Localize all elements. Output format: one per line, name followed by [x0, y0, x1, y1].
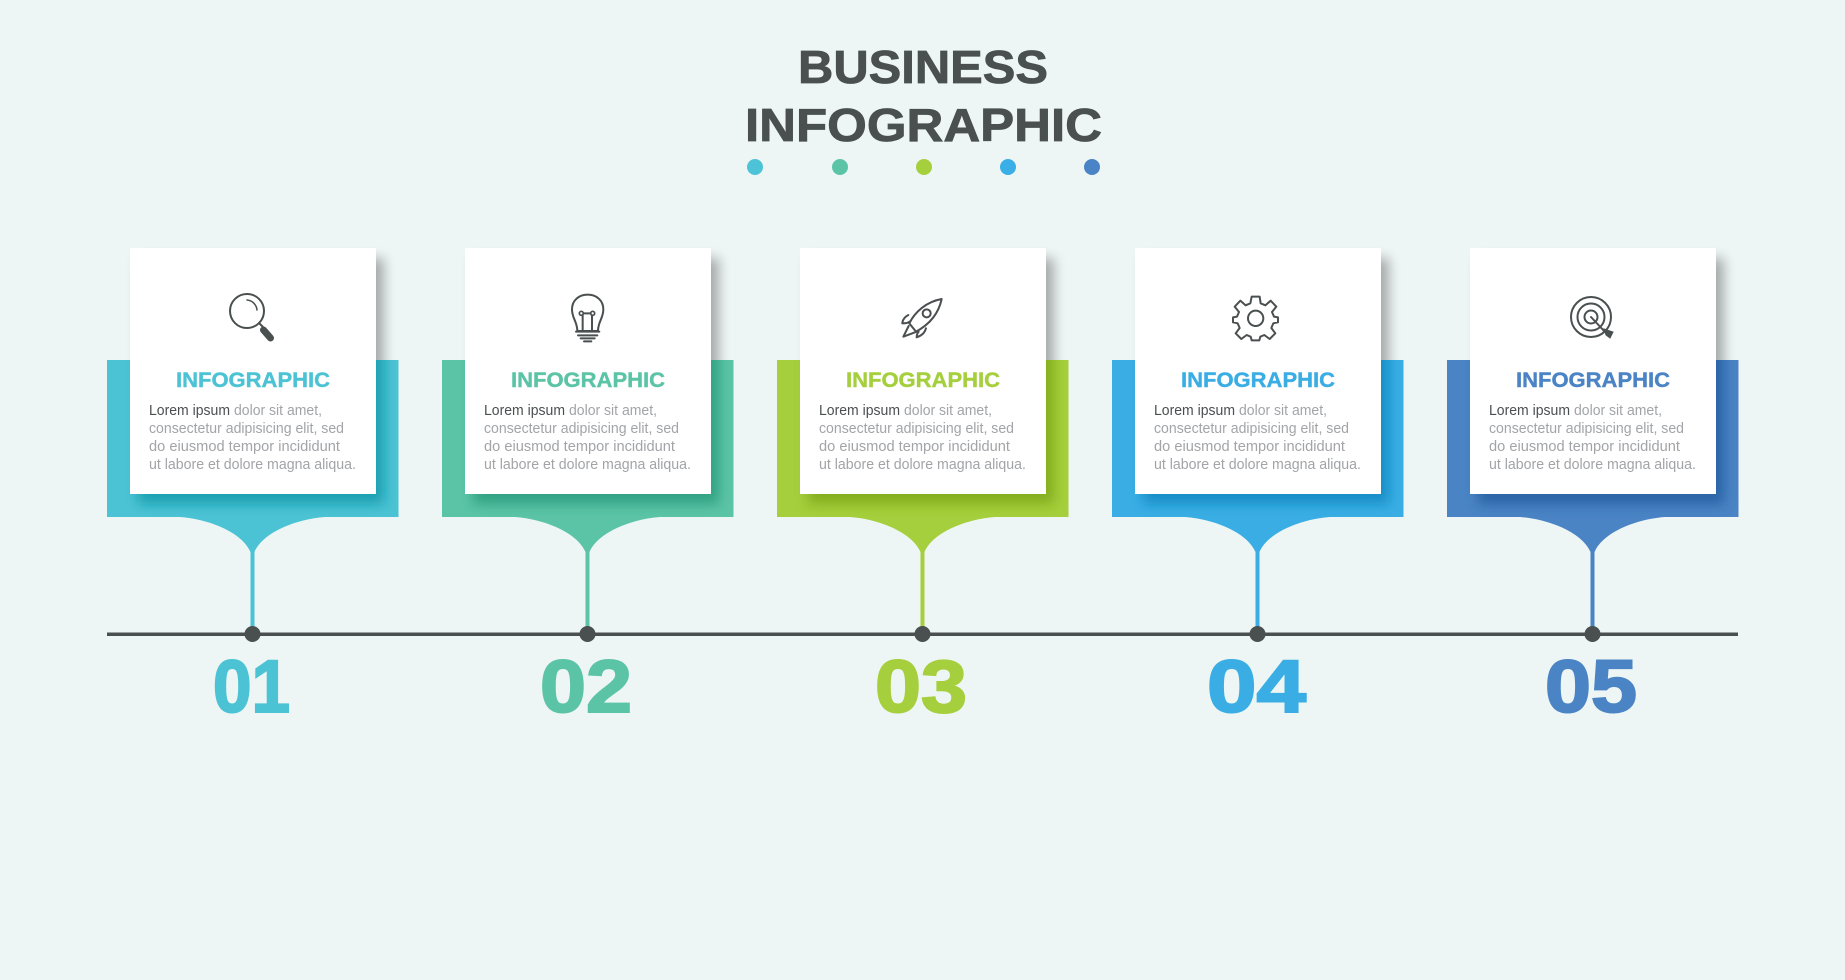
- title: INFOGRAPHIC: [745, 99, 1102, 151]
- title: BUSINESS: [798, 41, 1048, 93]
- heading: INFOGRAPHIC: [511, 369, 665, 392]
- card shadow on background: [1478, 258, 1724, 504]
- card: [465, 248, 711, 494]
- body text: ut labore et dolore magna aliqua.: [484, 457, 691, 473]
- number: 05: [1545, 645, 1637, 728]
- icon: target: [1571, 297, 1613, 338]
- body text: do eiusmod tempor incididunt: [484, 439, 675, 455]
- body text: Lorem ipsum: [484, 403, 565, 419]
- body text: do eiusmod tempor incididunt: [1154, 439, 1345, 455]
- heading: INFOGRAPHIC: [846, 369, 1000, 392]
- number: 04: [1207, 645, 1306, 728]
- panel 3: [777, 248, 1068, 728]
- body text: do eiusmod tempor incididunt: [149, 439, 340, 455]
- body text: Lorem ipsum: [1489, 403, 1570, 419]
- node: [244, 626, 260, 642]
- card shadow on background: [473, 258, 719, 504]
- colour dots: [747, 159, 1100, 175]
- body text: dolor sit amet,: [569, 403, 657, 419]
- node: [580, 626, 596, 642]
- panel 2: [442, 248, 734, 728]
- card shadow on colour block: [468, 360, 724, 510]
- heading: INFOGRAPHIC: [1516, 369, 1670, 392]
- body text: ut labore et dolore magna aliqua.: [149, 457, 356, 473]
- body text: dolor sit amet,: [904, 403, 992, 419]
- icon: light bulb: [572, 295, 603, 341]
- colour block and connector: [1112, 360, 1404, 634]
- panel 1: [107, 248, 398, 728]
- body text: [484, 403, 691, 473]
- colour block and connector: [442, 360, 734, 634]
- body text: consectetur adipisicing elit, sed: [149, 421, 344, 437]
- body text: ut labore et dolore magna aliqua.: [1154, 457, 1361, 473]
- card: [1135, 248, 1381, 494]
- number: 01: [213, 645, 290, 728]
- icon: rocket: [902, 299, 942, 337]
- node: [1250, 626, 1266, 642]
- colour block and connector: [1447, 360, 1738, 634]
- card shadow on colour block: [132, 360, 390, 510]
- body text: consectetur adipisicing elit, sed: [1489, 421, 1684, 437]
- body text: do eiusmod tempor incididunt: [1489, 439, 1680, 455]
- body text: [1489, 403, 1696, 473]
- card shadow on colour block: [802, 360, 1060, 510]
- card shadow on background: [1143, 258, 1389, 504]
- card shadow on colour block: [1474, 360, 1728, 510]
- body text: ut labore et dolore magna aliqua.: [819, 457, 1026, 473]
- body text: dolor sit amet,: [234, 403, 322, 419]
- timeline line: [107, 632, 1738, 636]
- panel 4: [1112, 248, 1404, 728]
- body text: [819, 403, 1026, 473]
- body text: [1154, 403, 1361, 473]
- icon: magnifier: [230, 294, 270, 338]
- card: [1470, 248, 1716, 494]
- body text: Lorem ipsum: [1154, 403, 1235, 419]
- card shadow on background: [808, 258, 1054, 504]
- body text: consectetur adipisicing elit, sed: [1154, 421, 1349, 437]
- card: [130, 248, 376, 494]
- colour block and connector: [107, 360, 398, 634]
- body text: do eiusmod tempor incididunt: [819, 439, 1010, 455]
- title: [745, 41, 1102, 151]
- card shadow on colour block: [1138, 360, 1394, 510]
- colour block and connector: [777, 360, 1068, 634]
- node: [914, 626, 930, 642]
- panel 5: [1447, 248, 1738, 728]
- body text: dolor sit amet,: [1574, 403, 1662, 419]
- body text: Lorem ipsum: [819, 403, 900, 419]
- heading: INFOGRAPHIC: [1181, 369, 1335, 392]
- body text: [149, 403, 356, 473]
- body text: ut labore et dolore magna aliqua.: [1489, 457, 1696, 473]
- body text: dolor sit amet,: [1239, 403, 1327, 419]
- card: [800, 248, 1046, 494]
- card shadow on background: [138, 258, 384, 504]
- number: 03: [875, 645, 967, 728]
- number: 02: [540, 645, 632, 728]
- node: [1584, 626, 1600, 642]
- body text: consectetur adipisicing elit, sed: [484, 421, 679, 437]
- body text: Lorem ipsum: [149, 403, 230, 419]
- heading: INFOGRAPHIC: [176, 369, 330, 392]
- body text: consectetur adipisicing elit, sed: [819, 421, 1014, 437]
- icon: gear: [1233, 297, 1278, 340]
